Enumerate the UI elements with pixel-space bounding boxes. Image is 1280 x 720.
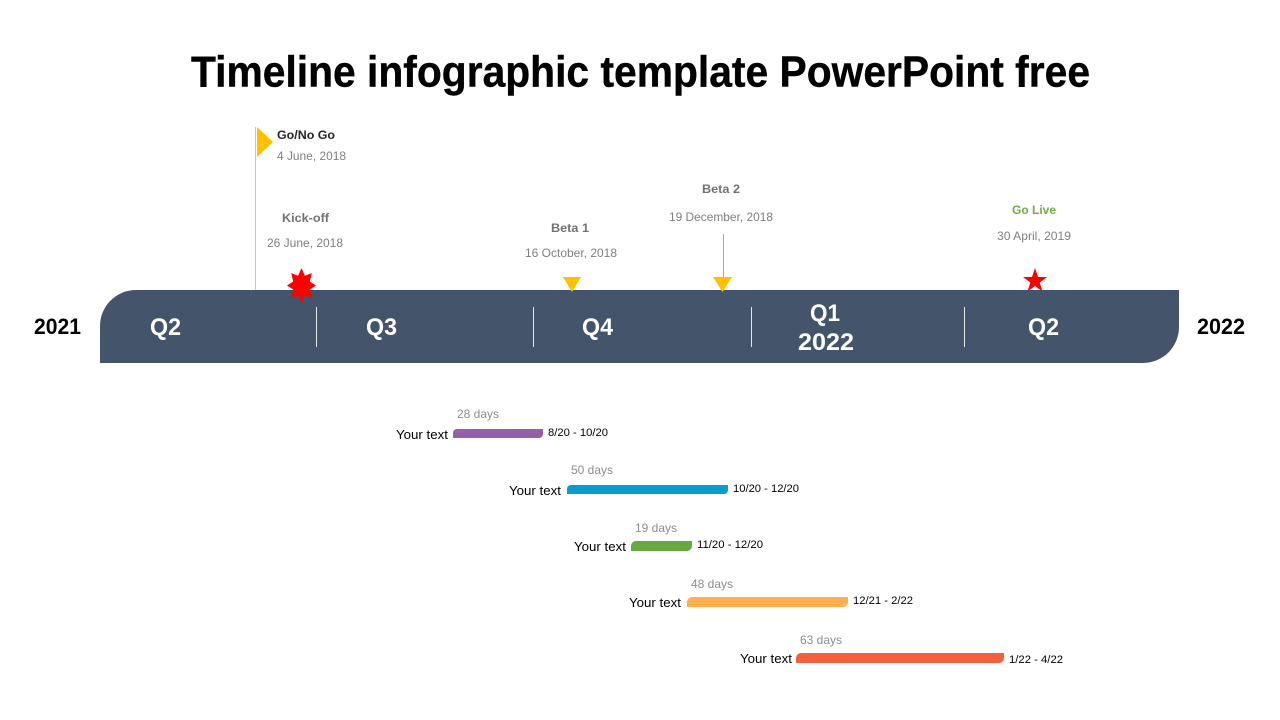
milestone: Go Live: Go Live bbox=[1012, 203, 1056, 217]
milestone: Go/No Go: Go/No Go bbox=[277, 128, 335, 142]
timeline band bbox=[100, 290, 1179, 363]
task 5 bbox=[740, 633, 1063, 666]
quarter label: Q1 2022 bbox=[798, 300, 854, 356]
title: Timeline infographic template PowerPoint free bbox=[191, 48, 1090, 96]
icon: triangle Beta 1 bbox=[563, 277, 581, 292]
task 4: Your text bbox=[629, 596, 682, 610]
icon: red burst bbox=[287, 268, 316, 303]
task 2: 10/20 - 12/20 bbox=[733, 483, 799, 495]
quarter label: Q3: Q3 bbox=[366, 314, 397, 341]
milestone: Beta 2: 19 December, 2018 bbox=[669, 210, 773, 224]
milestone: Go Live bbox=[997, 203, 1071, 243]
task 5: 1/22 - 4/22 bbox=[1009, 654, 1063, 666]
milestone: Kick-off: Kick-off bbox=[282, 211, 330, 225]
milestone: Go Live: 30 April, 2019 bbox=[997, 229, 1071, 243]
milestone: Beta 1: Beta 1 bbox=[551, 221, 589, 235]
milestone: Kick-off: 26 June, 2018 bbox=[267, 236, 343, 250]
task 2: Your text bbox=[509, 484, 562, 498]
milestone: Beta 1 bbox=[525, 221, 617, 260]
milestone: Go/No Go bbox=[256, 127, 346, 291]
task 1: 28 days bbox=[457, 407, 499, 421]
task 1: 8/20 - 10/20 bbox=[548, 427, 608, 439]
milestone: Go/No Go: 4 June, 2018 bbox=[277, 149, 346, 163]
task 2: 50 days bbox=[571, 463, 613, 477]
task 3: 19 days bbox=[635, 521, 677, 535]
milestone: Beta 2: Beta 2 bbox=[702, 182, 740, 196]
task 4 bbox=[629, 577, 913, 610]
milestone: Kick-off bbox=[267, 211, 343, 250]
task 5: 63 days bbox=[800, 633, 842, 647]
task 4: 48 days bbox=[691, 577, 733, 591]
quarter label: Q2: Q2 bbox=[1028, 314, 1059, 341]
task 4: 12/21 - 2/22 bbox=[853, 595, 913, 607]
task 1: Your text bbox=[396, 428, 449, 442]
quarter label: Q2: Q2 bbox=[150, 314, 181, 341]
icon: red star bbox=[1023, 268, 1047, 292]
task 5: Your text bbox=[740, 652, 793, 666]
icon: triangle Beta 2 bbox=[713, 277, 732, 292]
milestone: Beta 2 bbox=[669, 182, 773, 280]
task 3: Your text bbox=[574, 540, 627, 554]
task 3: 11/20 - 12/20 bbox=[697, 539, 763, 551]
quarter label: Q4: Q4 bbox=[582, 314, 614, 341]
quarter label: Q1 2022: Q1 bbox=[810, 300, 840, 327]
quarter label: Q1 2022: 2022 bbox=[798, 329, 854, 356]
year label: 2022: 2022 bbox=[1197, 314, 1245, 339]
task 2 bbox=[509, 463, 799, 498]
task 1 bbox=[396, 407, 608, 442]
task 3 bbox=[574, 521, 763, 554]
year label: 2021: 2021 bbox=[34, 314, 81, 339]
milestone: Beta 1: 16 October, 2018 bbox=[525, 246, 617, 260]
